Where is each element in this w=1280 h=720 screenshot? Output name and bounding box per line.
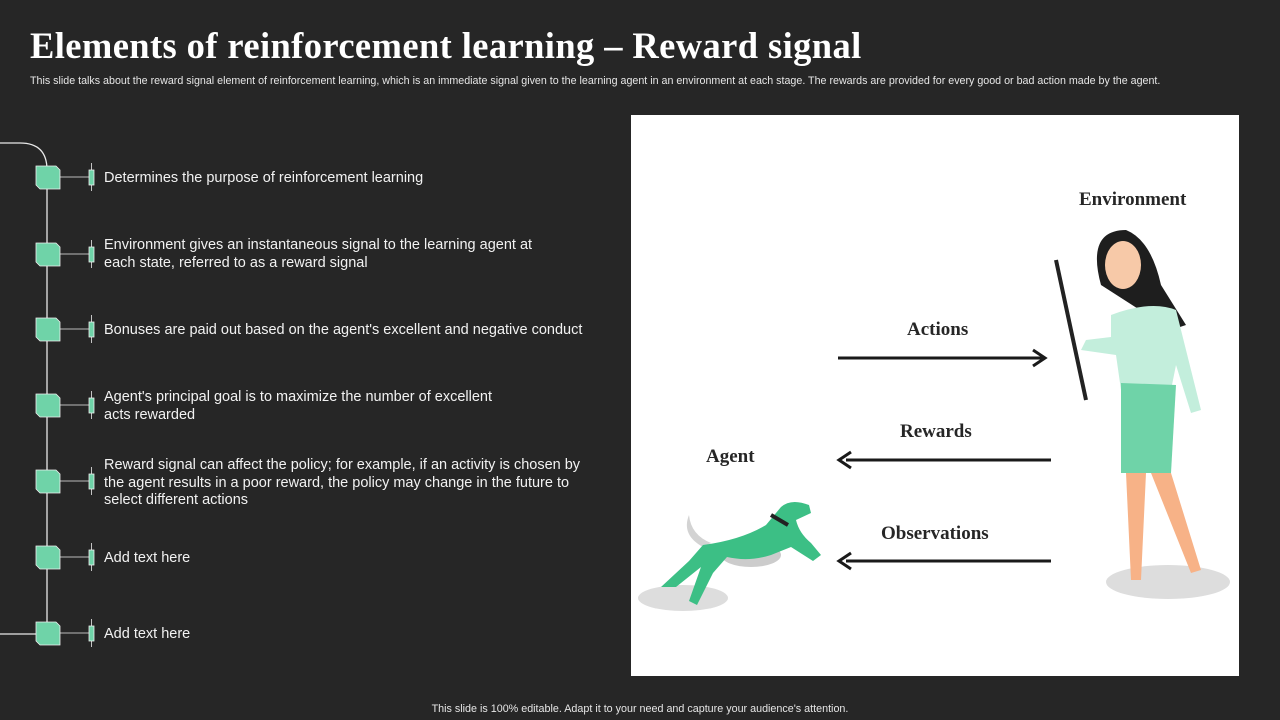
panel: diagram: Agent xyxy=(706,446,755,467)
text: each state, referred to as a reward signal xyxy=(104,254,368,270)
text: Environment gives an instantaneous signal to the learning agent at xyxy=(104,237,532,253)
text: Bonuses are paid out based on the agent's excellent and negative conduct xyxy=(104,322,582,338)
text: Agent's principal goal is to maximize the number of excellent xyxy=(104,389,492,405)
panel: diagram xyxy=(631,115,1239,676)
text blocks: Determines the purpose of reinforcement learning xyxy=(104,170,423,186)
subtitle: This slide talks about the reward signal element of reinforcement learning, which is an immediate signal given to the learning agent in an environment at each stage. The rewards are provided for every good or bad action made by the agent. xyxy=(30,75,1160,87)
text: select different actions xyxy=(104,492,248,508)
text: Add text here xyxy=(104,550,190,566)
text: the agent results in a poor reward, the policy may change in the future to xyxy=(104,474,569,490)
text: acts rewarded xyxy=(104,406,195,422)
icon: woman xyxy=(1056,230,1230,599)
panel: diagram: Actions xyxy=(907,319,968,340)
timeline xyxy=(0,142,94,647)
panel: diagram: Observations xyxy=(881,523,989,544)
title: Elements of reinforcement learning – Reward signal xyxy=(30,25,862,66)
footer: This slide is 100% editable. Adapt it to your need and capture your audience's attention. xyxy=(432,703,848,715)
text: Add text here xyxy=(104,626,190,642)
panel: diagram: Rewards xyxy=(900,421,972,442)
icon: dog xyxy=(638,502,821,611)
text: Reward signal can affect the policy; for example, if an activity is chosen by xyxy=(104,457,580,473)
panel: diagram: Environment xyxy=(1079,189,1187,210)
